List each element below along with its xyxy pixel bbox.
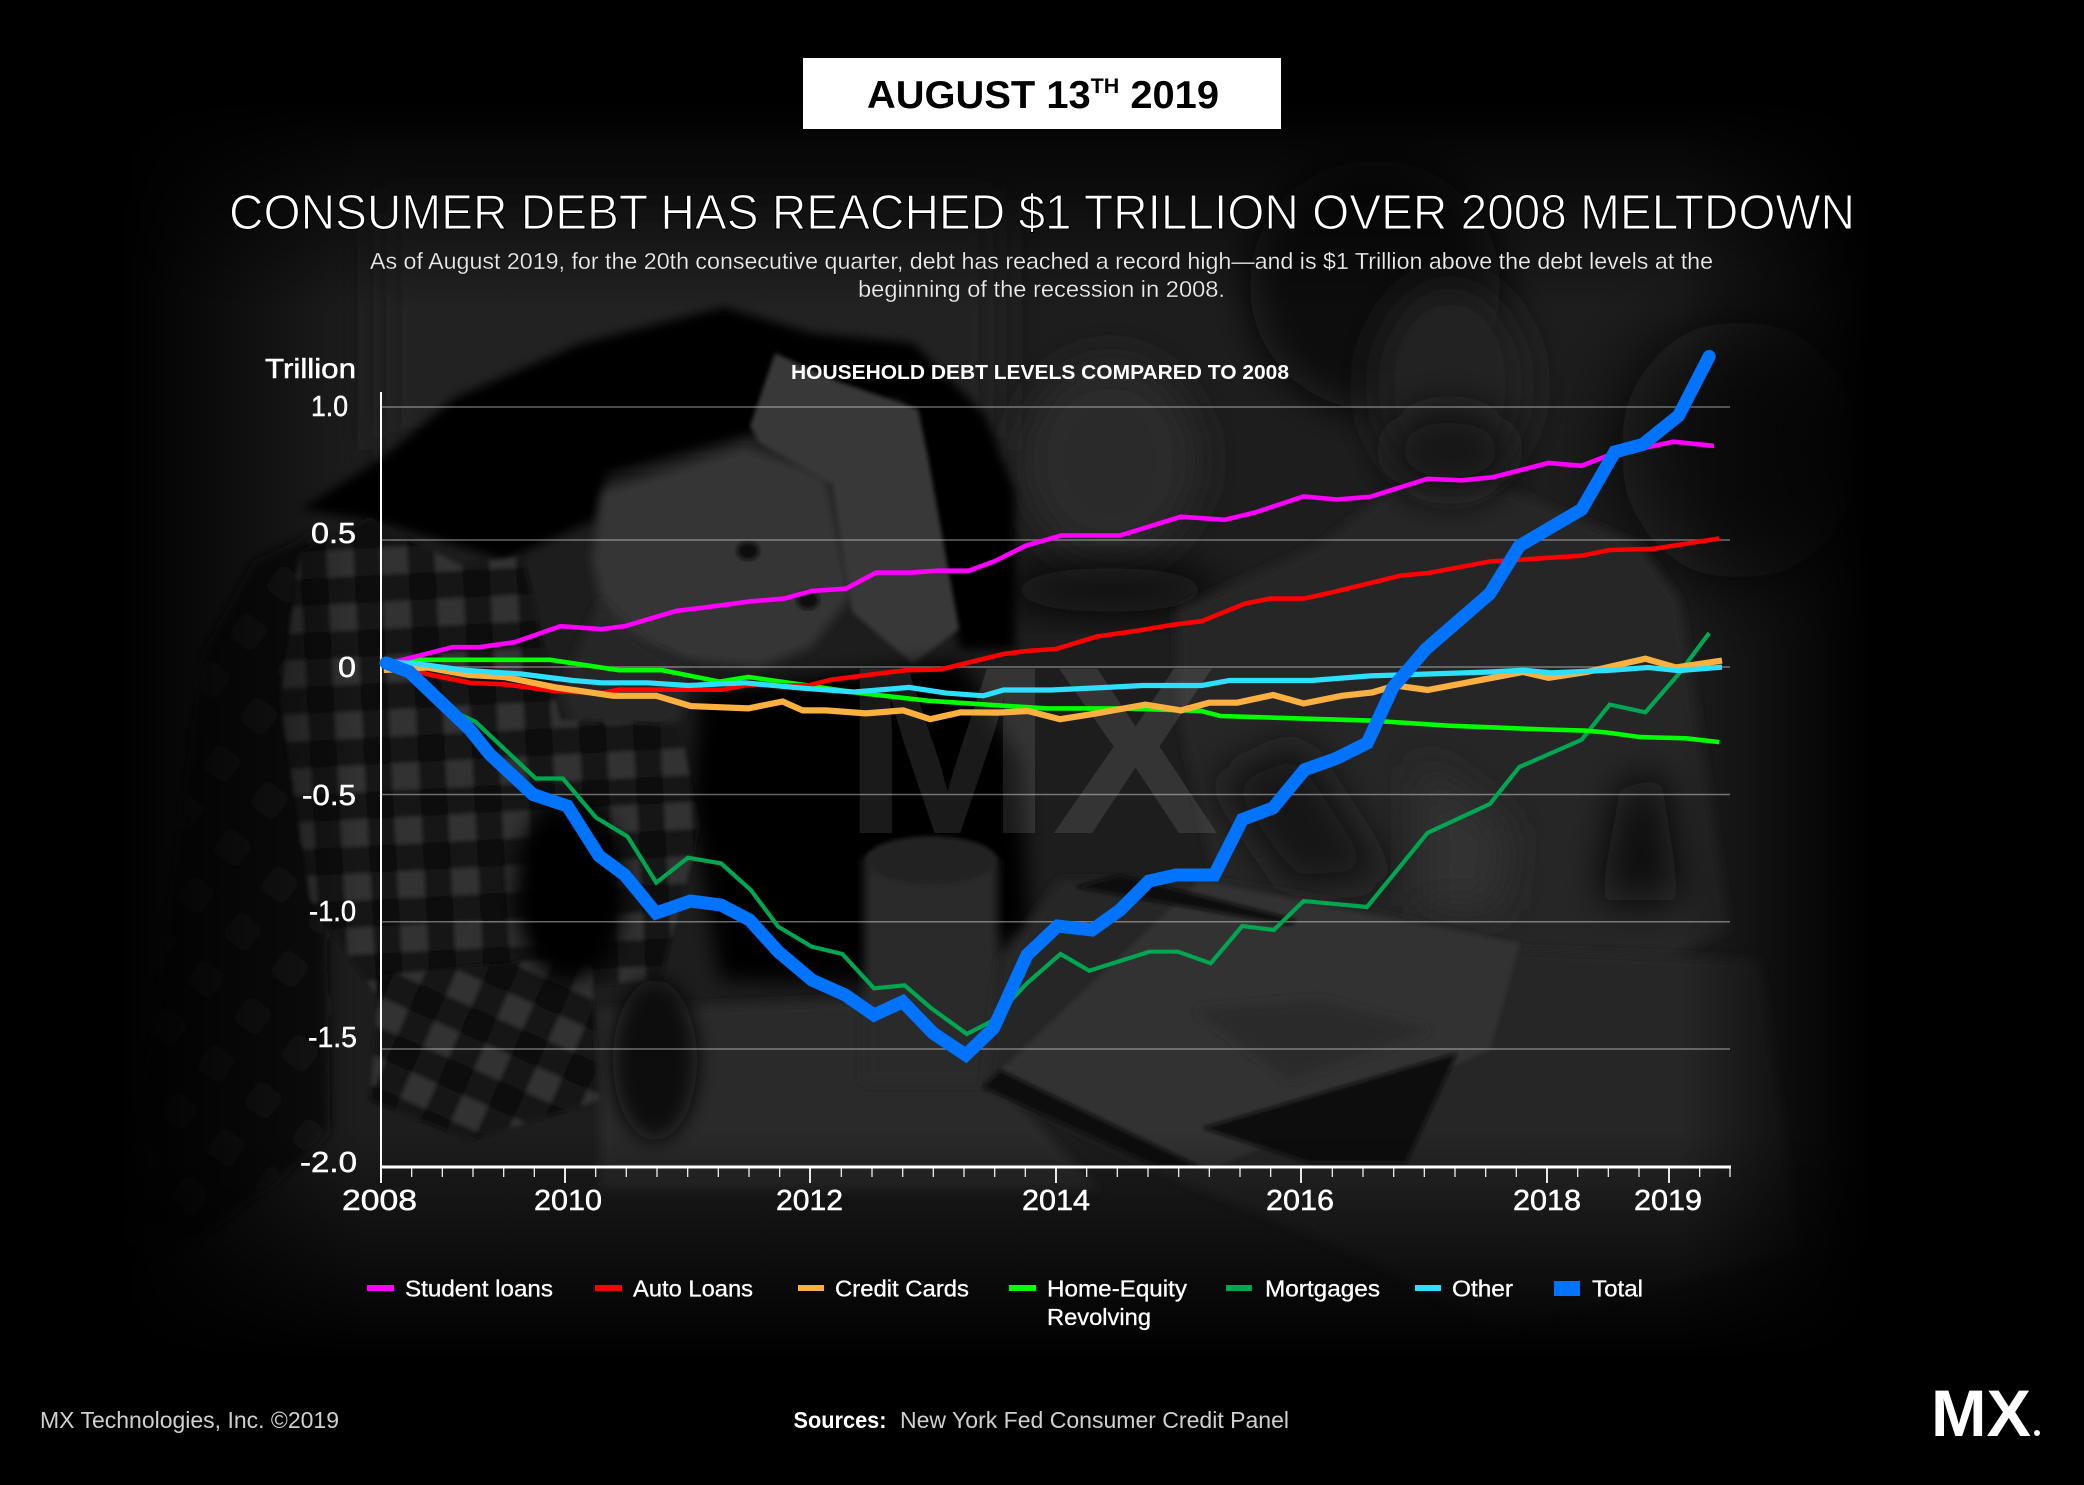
woman hand and forearm <box>750 353 959 664</box>
laptop dark edge <box>982 1070 1200 1167</box>
left vignette <box>120 0 360 1485</box>
footer sources: Sources: <box>794 1407 886 1433</box>
back wall: objects between the couple <box>1020 360 1200 560</box>
man arm shadow <box>1215 740 1390 890</box>
date banner: AUGUST 13 <box>867 74 1086 117</box>
coffee cup <box>864 858 998 1083</box>
left sleeve plaid <box>120 530 330 1260</box>
line: total <box>386 356 1709 1055</box>
legend: other: Other <box>1452 1276 1513 1302</box>
man torso <box>1176 490 1730 980</box>
x-axis labels: 2018 <box>1513 1185 1581 1217</box>
laptop screen reflection <box>1195 1000 1430 1080</box>
y-axis labels: -0.5 <box>302 780 356 812</box>
line: student loans <box>390 442 1714 663</box>
x-axis labels: 2012 <box>776 1185 843 1217</box>
back wall: dark shelf <box>1000 568 1220 612</box>
shirt plaid <box>280 518 700 1000</box>
dark pen on desk <box>1074 875 1297 925</box>
legend: student loans: Student loans <box>405 1276 553 1302</box>
line: home-equity revolving <box>395 660 1719 742</box>
x-axis labels: 2019 <box>1634 1185 1702 1217</box>
woman neck <box>560 600 690 760</box>
legend: total <box>1554 1276 1643 1302</box>
y-axis unit label: Trillion <box>265 353 356 384</box>
date banner: TH <box>1091 75 1119 98</box>
man face <box>1372 280 1528 490</box>
date banner: 2019 <box>1119 74 1219 117</box>
y-axis labels: -1.5 <box>308 1022 357 1054</box>
table and forearm <box>600 1000 1100 1190</box>
legend: auto loans: Auto Loans <box>633 1276 753 1302</box>
subtitle text block <box>370 248 1713 302</box>
bottom vignette <box>0 1130 2084 1360</box>
legend: home-equity revolving: Home-Equity <box>1047 1276 1188 1302</box>
legend: home-equity revolving: Revolving <box>1047 1304 1151 1330</box>
line: credit cards <box>384 659 1722 719</box>
man side shadow <box>1600 770 1680 900</box>
line: other <box>389 662 1722 696</box>
desk behind laptop <box>985 880 1800 1330</box>
bracelets <box>613 980 697 1140</box>
cup rim <box>865 836 997 884</box>
man hair <box>1250 160 1500 410</box>
woman hair over chest <box>690 660 1030 985</box>
legend: total: Total <box>1592 1276 1643 1302</box>
y-axis labels: -2.0 <box>300 1147 357 1179</box>
back wall: left window band <box>380 200 1000 450</box>
chart heading: HOUSEHOLD DEBT LEVELS COMPARED TO 2008 <box>791 362 1289 384</box>
footer copyright: MX Technologies, Inc. ©2019 <box>40 1407 339 1433</box>
laptop keyboard <box>1202 1053 1457 1163</box>
cuff plaid <box>370 955 600 1140</box>
shirt pocket shadow <box>515 800 625 980</box>
man beard <box>1388 408 1512 492</box>
woman hair <box>301 307 1015 650</box>
x-axis labels: 2014 <box>1022 1185 1090 1217</box>
x-axis labels <box>342 1185 1702 1217</box>
legend: home-equity revolving <box>1009 1276 1188 1330</box>
y-axis labels <box>300 391 357 1179</box>
legend <box>367 1276 1643 1330</box>
woman face <box>592 447 852 667</box>
footer sources: New York Fed Consumer Credit Panel <box>900 1407 1289 1433</box>
woman eye <box>797 591 819 609</box>
laptop lid <box>985 880 1520 1170</box>
gridlines and axes <box>381 392 1731 1183</box>
legend: other <box>1415 1276 1513 1302</box>
line: mortgages <box>395 633 1709 1034</box>
y-axis labels: 0.5 <box>311 518 356 550</box>
subtitle text block: beginning of the recession in 2008. <box>858 276 1225 302</box>
MX logo: MX <box>1931 1376 2031 1450</box>
watermark: MX logo: MX <box>843 617 1219 884</box>
top vignette <box>0 100 2084 310</box>
y-axis labels: -1.0 <box>309 896 356 928</box>
line: auto loans <box>400 538 1719 693</box>
subtitle text block: As of August 2019, for the 20th consecutive quarter, debt has reached a record high—and is $1 Trillion above the debt levels at the <box>370 248 1713 274</box>
back wall: dark area right of man <box>1620 320 1860 580</box>
y-axis labels: 1.0 <box>311 391 348 423</box>
right vignette <box>1680 0 1870 1485</box>
woman eye <box>737 542 759 560</box>
line chart: household debt by category <box>384 356 1722 1055</box>
legend: credit cards: Credit Cards <box>835 1276 969 1302</box>
x-axis labels: 2010 <box>534 1185 602 1217</box>
y-axis labels: 0 <box>338 652 356 684</box>
x-axis labels: 2016 <box>1266 1185 1334 1217</box>
x-axis labels: 2008 <box>342 1185 417 1217</box>
date banner <box>803 58 1281 129</box>
title: CONSUMER DEBT HAS REACHED $1 TRILLION OVER 2008 MELTDOWN <box>229 186 1855 240</box>
legend: mortgages: Mortgages <box>1265 1276 1380 1302</box>
man rolled sleeve <box>1420 760 1510 910</box>
